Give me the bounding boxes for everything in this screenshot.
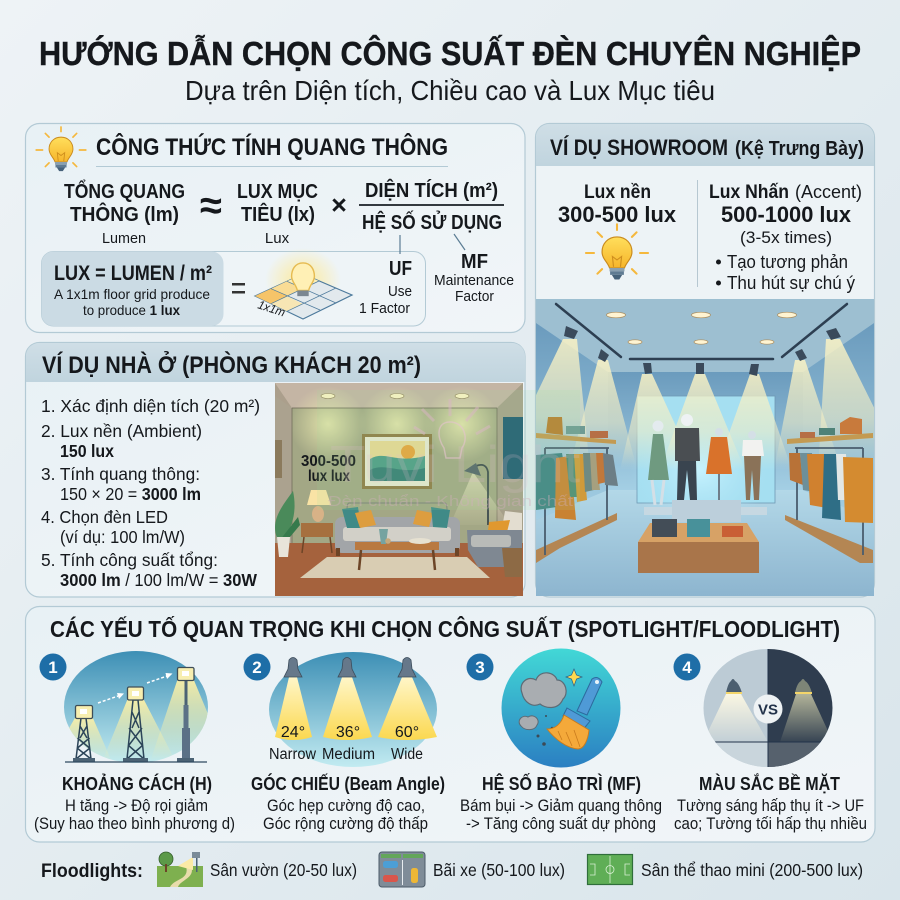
factor 3: maintenance factor [460,648,662,833]
wall painting [362,434,432,489]
factor 4 text [674,773,867,833]
formula term: target lux: TIÊU (lx) [241,202,315,226]
left clothes shelf [536,417,618,563]
panel: living room example [26,342,525,597]
number badge 4: 4 [682,658,692,677]
floor grid with bulb [255,248,352,320]
calculation steps: 4. Chọn đèn LED [41,507,168,527]
downlights [321,394,469,398]
factor 3 text: HỆ SỐ BẢO TRÌ (MF) [482,773,641,794]
factor 1 text [34,773,235,833]
calculation steps: 1. Xác định diện tích (20 m²) [41,396,260,416]
sofa [335,503,460,556]
title: HƯỚNG DẪN CHỌN CÔNG SUẤT ĐÈN CHUYÊN NGHIỆP [39,34,861,72]
sports field lux text: Sân thể thao mini (200-500 lux) [641,860,863,880]
factor 2 text: GÓC CHIẾU (Beam Angle) [251,773,445,794]
factor 4: surface colour [674,649,867,833]
UF label: Use [388,283,412,300]
number badge 4 [674,654,700,680]
illustration: living room [275,383,523,596]
pole light [73,668,194,762]
coffee table [355,529,439,570]
factor 2 text: Góc hẹp cường độ cao, [267,797,425,815]
number badge 2: 2 [252,658,262,677]
factor 1 text: KHOẢNG CÁCH (H) [62,773,212,794]
leader line to MF [454,234,465,250]
illustration: towers at different heights [64,651,208,763]
showroom header [536,124,874,166]
formula term: target lux [237,181,318,247]
formula term: target lux: LUX MỤC [237,181,318,203]
calculation steps: 3000 lm / 100 lm/W = 30W [60,570,257,590]
accent lux text: Lux Nhấn [709,182,789,203]
panel: key factors [26,606,875,842]
UF label: 1 Factor [359,300,410,317]
watermark overlay: Đèn chuẩn - Không gian chất [328,493,574,510]
formula term: total flux: Lumen [102,230,146,247]
armchair [467,511,522,577]
MF label: Maintenance [434,272,514,289]
living room header: VÍ DỤ NHÀ Ở (PHÒNG KHÁCH 20 m²) [42,350,421,379]
ambient lux text [558,182,677,227]
icon: light bulb [36,127,86,171]
footer: floodlight uses [41,852,863,887]
panel: showroom example [534,122,876,598]
multiply sign: × [331,190,347,220]
floor and rug [275,543,523,596]
UF label: UF [389,258,412,280]
number badge 1: 1 [48,658,58,677]
subtitle: Dựa trên Diện tích, Chiều cao và Lux Mục tiêu [185,75,715,106]
dust cloud [521,673,566,708]
calculation steps [41,396,260,590]
ambient lux text: 300-500 lux [558,202,677,227]
accent lux text: 500-1000 lux [721,202,852,227]
calculation steps: (ví dụ: 100 lm/W) [60,527,185,547]
sparkle [566,669,582,686]
factor 3 text: Bám bụi -> Giảm quang thông [460,797,662,815]
ambient lux text: Lux nền [584,182,651,203]
mannequins on platform [644,414,767,522]
callout: lux definition: LUX = LUMEN / m² [54,262,212,285]
VS badge [754,694,782,724]
UF label [359,258,412,317]
icon: garden [157,852,203,887]
floor grid with bulb: 1x1m [256,298,287,320]
parking lux text: Bãi xe (50-100 lux) [433,860,565,880]
window [503,417,523,479]
accent lux text: Tạo tương phản [727,252,848,272]
formula fraction [359,178,504,234]
illustration: light versus dark wall [703,649,833,767]
calculation steps: 150 lux [60,441,114,461]
right clothes shelf [785,417,873,563]
arrows [98,673,172,703]
floor lamp [454,463,504,525]
calculation steps: 150 × 20 = 3000 lm [60,484,201,504]
watermark overlay [317,390,581,510]
calculation steps: 3. Tính quang thông: [41,464,200,484]
factor 2: beam angle [244,652,445,833]
factor 3 text [460,773,662,833]
light beams [536,339,874,466]
illustration: beam angles: 36° [336,724,360,741]
formula term: target lux: Lux [265,230,290,247]
callout: lux definition [42,248,426,326]
table lamp [301,490,333,553]
number badge 3: 3 [475,658,485,677]
icon: sports field [588,854,632,884]
garden lux text: Sân vườn (20-50 lux) [210,860,357,880]
factor 1: distance [34,651,235,833]
illustration: showroom interior [536,299,874,596]
factor 4 text: MÀU SẮC BỀ MẶT [699,773,840,794]
room lux label: 300-500 [301,453,356,470]
number badge 3 [466,654,494,680]
number badge 2 [244,654,270,680]
approximately sign: ≈ [200,184,222,228]
callout: lux definition: to produce 1 lux [83,302,180,318]
formula heading: CÔNG THỨC TÍNH QUANG THÔNG [96,133,448,161]
accent lux text: (Accent) [795,182,862,202]
tower one [76,700,144,759]
illustration: beam angles: Medium [322,746,375,763]
factor 4 text: cao; Tường tối hấp thụ nhiều [674,815,867,833]
factor 2 text [251,773,445,833]
panel: luminous flux formula [26,124,525,332]
illustration: beam angles: Narrow [269,746,317,763]
display table [638,519,759,573]
room lux label [301,453,356,485]
number badge 1 [40,654,66,680]
factor 1 text: H tăng -> Độ rọi giảm [65,797,208,815]
ceiling downlights [606,312,796,344]
plant [275,491,300,557]
icon: parking [379,852,425,887]
formula term: total flux [64,179,185,247]
watermark overlay: Tuvi Light [330,436,581,494]
VS badge: VS [758,702,778,718]
factor 3 text: -> Tăng công suất dự phòng [466,815,656,833]
floodlights label: Floodlights: [41,861,143,882]
MF label: Factor [455,288,494,305]
brush [577,678,602,715]
illustration: dust and brush [502,648,620,768]
factor 2 text: Góc rộng cường độ thấp [263,815,428,833]
illustration: beam angles: Wide [391,746,423,763]
room lux label: lux lux [308,468,350,485]
leader line to UF [399,235,401,254]
accent lux text: Thu hút sự chú ý [727,273,855,293]
factor 1 text: (Suy hao theo bình phương d) [34,815,235,833]
spot heads [564,326,841,376]
MF label: MF [461,251,488,273]
calculation steps: 5. Tính công suất tổng: [41,550,218,570]
track rails [556,304,847,359]
formula term: total flux: THÔNG (lm) [70,202,179,226]
illustration: beam angles: 24° [281,724,305,741]
accent lux text [709,182,862,293]
icon: showroom bulb [586,224,648,279]
illustration: beam angles: 60° [395,724,419,741]
formula term: total flux: TỔNG QUANG [64,179,185,203]
illustration: beam angles [269,652,437,767]
MF label [434,251,514,305]
living room header [26,343,525,382]
callout: lux definition: A 1x1m floor grid produce [54,286,210,302]
calculation steps: 2. Lux nền (Ambient) [41,421,202,441]
showroom header: VÍ DỤ SHOWROOM [550,135,728,160]
formula fraction: HỆ SỐ SỬ DỤNG [362,210,502,234]
accent lux text: (3-5x times) [740,228,832,247]
showroom header: (Kệ Trưng Bày) [735,138,864,160]
factor 4 text: Tường sáng hấp thụ ít -> UF [677,797,864,815]
formula fraction: DIỆN TÍCH (m²) [365,178,498,202]
